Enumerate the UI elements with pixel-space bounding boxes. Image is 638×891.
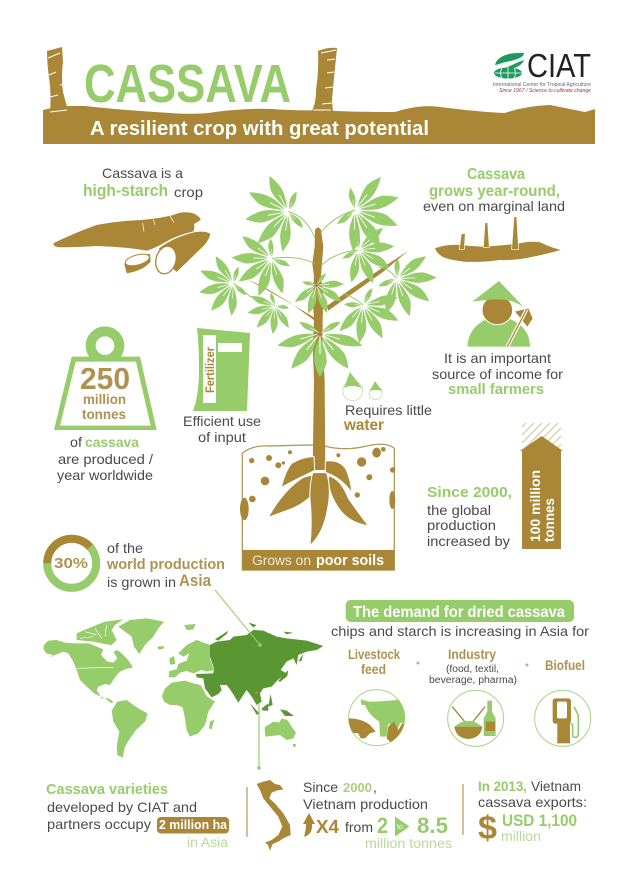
icon: fuel pump (535, 690, 591, 746)
value: USD 1,100 (502, 812, 577, 830)
icon: food and bottle (448, 690, 504, 746)
icon: cassava roots (53, 212, 211, 276)
header banner (43, 47, 595, 144)
text: are produced / (58, 451, 153, 467)
biofuel heading: Biofuel (545, 657, 585, 673)
text: Cassava is a (102, 165, 183, 181)
arrow label: to (397, 824, 403, 831)
pointer: Asia to map (215, 590, 262, 647)
text: production (427, 517, 496, 533)
block: high-starch crop (53, 165, 211, 276)
left cassava stick (47, 47, 69, 114)
CIAT logo (493, 47, 591, 94)
bag label: Fertilizer (203, 347, 217, 393)
roots (268, 457, 368, 546)
text: even on marginal land (423, 198, 565, 214)
text: Vietnam (531, 778, 581, 794)
bullet (526, 664, 528, 666)
text: Efficient use (183, 413, 261, 429)
emphasis: Asia (179, 571, 211, 590)
text: Since (303, 779, 338, 795)
multiplier: X4 (316, 817, 339, 837)
icon: stems in soil (435, 217, 561, 262)
logo wordmark: CIAT (527, 47, 591, 84)
industry note: beverage, pharma) (429, 675, 517, 686)
pill text: 2 million ha (159, 818, 228, 832)
pill (157, 817, 229, 834)
text: increased by (427, 533, 510, 549)
unit: tonnes (82, 406, 126, 422)
heading: Cassava varieties (46, 781, 168, 798)
icon: Vietnam map (257, 780, 291, 851)
soil box (242, 444, 394, 571)
arctic channels (77, 625, 113, 668)
pointer: map to Vietnam (257, 703, 261, 770)
title: CASSAVA (84, 54, 291, 114)
emphasis: world production (106, 556, 225, 573)
block: little water (343, 372, 432, 434)
arrow label: 100 million (528, 470, 543, 542)
text: year worldwide (57, 467, 153, 483)
heading: Since 2000, (427, 484, 512, 501)
emphasis: 2000 (343, 780, 372, 795)
leaves (191, 166, 450, 377)
comma: , (373, 779, 377, 795)
number: 250 (80, 361, 130, 396)
brown ground band (43, 105, 595, 144)
text: crop (174, 184, 203, 200)
label emphasis: poor soils (316, 552, 384, 569)
infographic canvas (43, 47, 595, 850)
end value: 8.5 (417, 813, 448, 838)
text: developed by CIAT and (47, 799, 197, 815)
light continents (43, 618, 296, 758)
block: small farmers (432, 281, 563, 398)
industry heading: Industry (448, 646, 496, 662)
unit: million (501, 828, 541, 844)
heading: grows year-round, (429, 183, 560, 200)
emphasis: water (343, 417, 384, 434)
emphasis: In 2013, (478, 779, 527, 794)
emphasis: cassava (85, 434, 139, 450)
divider (462, 784, 464, 835)
text: source of income for (432, 366, 563, 382)
emphasis: small farmers (448, 381, 544, 398)
text: partners occupy (47, 816, 151, 832)
text: from (345, 819, 373, 835)
text: It is an important (444, 350, 551, 366)
label text: Grows on (252, 553, 311, 568)
block: grows year-round (423, 166, 565, 262)
block: cassava varieties (46, 781, 229, 850)
logo tagline: Since 1967 / Science to cultivate change (499, 88, 591, 94)
icon: farmer (467, 281, 533, 347)
world map (43, 618, 323, 758)
Vietnam marker (255, 691, 258, 694)
highlighted Asia (196, 623, 323, 716)
stem (312, 227, 325, 470)
branches (327, 251, 408, 311)
block: demand for dried cassava (331, 600, 591, 747)
logo caption: International Center for Tropical Agriculture (493, 82, 591, 88)
text: chips and starch is increasing in Asia for (331, 623, 589, 639)
text: cassava exports: (478, 794, 587, 810)
logo globe icon (494, 53, 524, 79)
start value: 2 (377, 813, 388, 838)
cassava plant (191, 166, 450, 571)
soil label bar (242, 550, 394, 571)
bullet (416, 662, 420, 664)
emphasis: high-starch (83, 181, 168, 200)
text: Requires little (345, 402, 432, 418)
text: of input (198, 429, 246, 445)
block: Vietnam production (303, 779, 452, 851)
icon: up arrow (303, 813, 315, 837)
text: is grown in (107, 574, 176, 590)
arrow label: tonnes (542, 498, 557, 542)
livestock heading: Livestock (348, 646, 400, 662)
heading: Cassava (467, 166, 525, 183)
text: of the (107, 540, 143, 556)
block: fertilizer (183, 328, 261, 445)
right cassava stick (311, 48, 337, 114)
icon: dollar: $ (478, 809, 497, 846)
block: production weight (54, 331, 157, 483)
icon: livestock (348, 690, 405, 747)
banner (346, 600, 574, 622)
block: 30% in Asia (47, 539, 225, 590)
icon: water drops (343, 372, 382, 401)
arrow: to (395, 816, 410, 836)
divider (246, 787, 248, 837)
unit: million (83, 391, 126, 407)
livestock heading: feed (361, 661, 386, 677)
text: the global (427, 502, 491, 518)
banner text: The demand for dried cassava (353, 604, 565, 621)
text: Vietnam production (303, 796, 428, 812)
subtitle: A resilient crop with great potential (90, 118, 429, 140)
soil stones (240, 447, 395, 520)
number: 30% (54, 555, 88, 572)
arrow (520, 436, 563, 549)
hatched target area (522, 423, 561, 451)
icon: weight (54, 331, 157, 430)
text: of (70, 434, 82, 450)
block: Vietnam exports (478, 778, 587, 846)
text: in Asia (187, 834, 228, 850)
industry note: (food, textil, (446, 664, 499, 675)
donut chart (47, 539, 96, 588)
unit: million tonnes (365, 835, 452, 851)
soil label (252, 552, 384, 569)
block: global production increase (427, 423, 563, 549)
petioles (233, 210, 397, 306)
